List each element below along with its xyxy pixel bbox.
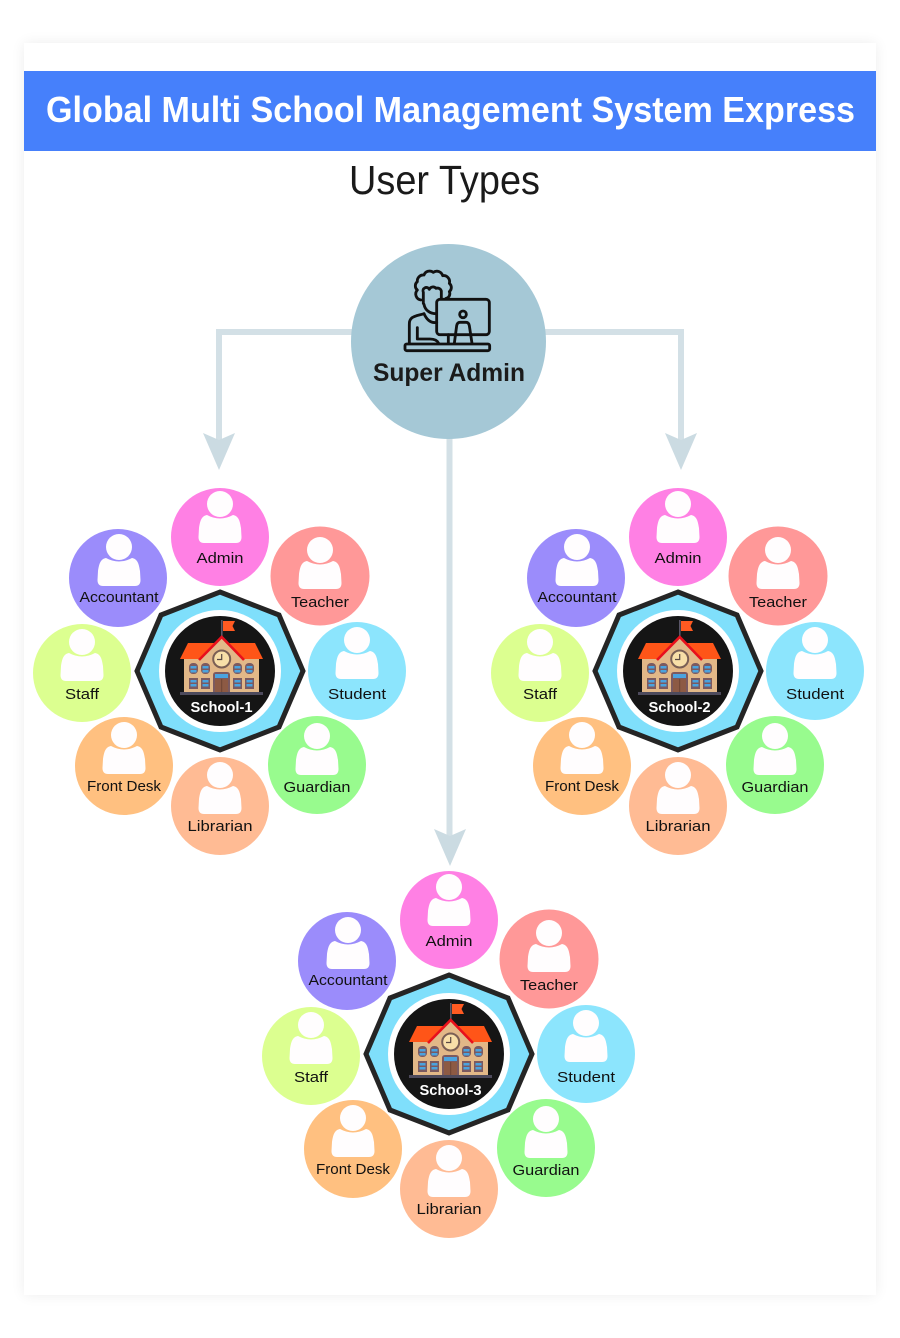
- bubble: guardian: Guardian: [742, 779, 808, 796]
- bubble: teacher: Teacher: [291, 594, 349, 611]
- bubble: student: [537, 1005, 635, 1103]
- bubble: front desk: [533, 717, 631, 815]
- title banner: Global Multi School Management System Express: [46, 89, 855, 130]
- bubble: admin: Admin: [426, 933, 472, 950]
- bubble: staff: [33, 624, 131, 722]
- school 2 group: [491, 488, 864, 855]
- bubble: staff: [491, 624, 589, 722]
- bubble: librarian: Librarian: [416, 1201, 482, 1218]
- arrow: super admin to school 3: [434, 436, 466, 866]
- bubble: staff: Staff: [294, 1069, 329, 1086]
- bubble: accountant: [298, 912, 396, 1010]
- bubble: front desk: Front Desk: [545, 778, 619, 795]
- bubble: teacher: Teacher: [520, 977, 578, 994]
- bubble: teacher: Teacher: [749, 594, 807, 611]
- bubble: staff: Staff: [65, 686, 100, 703]
- bubble: student: Student: [328, 686, 387, 703]
- bubble: staff: Staff: [523, 686, 558, 703]
- bubble: front desk: Front Desk: [87, 778, 161, 795]
- bubble: librarian: [400, 1140, 498, 1238]
- bubble: librarian: [629, 757, 727, 855]
- bubble: admin: Admin: [197, 550, 243, 567]
- label: super admin: Super Admin: [373, 359, 525, 387]
- bubble: admin: [400, 871, 498, 969]
- bubble: student: Student: [786, 686, 845, 703]
- bubble: teacher: [728, 526, 828, 626]
- bubble: staff: [262, 1007, 360, 1105]
- hub: school 1: [137, 592, 303, 750]
- bubble: teacher: [270, 526, 370, 626]
- super admin node: [351, 244, 546, 439]
- hub: school 3: [366, 975, 532, 1133]
- icon: admin at computer: [405, 271, 490, 351]
- bubble: front desk: [304, 1100, 402, 1198]
- bubble: admin: [629, 488, 727, 586]
- bubble: librarian: Librarian: [646, 818, 710, 835]
- bubble: accountant: [527, 529, 625, 627]
- bubble: student: [308, 622, 406, 720]
- bubble: student: [766, 622, 864, 720]
- hub: school 3: School-3: [420, 1082, 482, 1099]
- arrow: super admin to school 1: [203, 332, 352, 470]
- bubble: accountant: [69, 529, 167, 627]
- bubble: guardian: Guardian: [512, 1162, 580, 1179]
- bubble: front desk: [75, 717, 173, 815]
- bubble: guardian: [268, 716, 366, 814]
- title banner: [24, 71, 876, 151]
- school 1 group: [33, 488, 406, 855]
- bubble: librarian: [171, 757, 269, 855]
- hub: school 1: School-1: [190, 699, 252, 716]
- bubble: teacher: [500, 910, 598, 1008]
- hub: school 2: School-2: [648, 699, 710, 716]
- bubble: accountant: Accountant: [308, 972, 388, 989]
- heading: user types: User Types: [349, 157, 540, 203]
- bubble: student: Student: [557, 1069, 616, 1086]
- hub: school 2: [595, 592, 761, 750]
- bubble: guardian: Guardian: [284, 779, 350, 796]
- bubble: admin: Admin: [655, 550, 701, 567]
- bubble: accountant: Accountant: [538, 589, 617, 606]
- school 3 group: [262, 871, 635, 1238]
- bubble: librarian: Librarian: [188, 818, 252, 835]
- bubble: front desk: Front Desk: [316, 1161, 390, 1178]
- bubble: accountant: Accountant: [80, 589, 159, 606]
- bubble: guardian: [497, 1099, 595, 1197]
- arrow: super admin to school 2: [545, 332, 697, 470]
- bubble: guardian: [726, 716, 824, 814]
- bubble: admin: [171, 488, 269, 586]
